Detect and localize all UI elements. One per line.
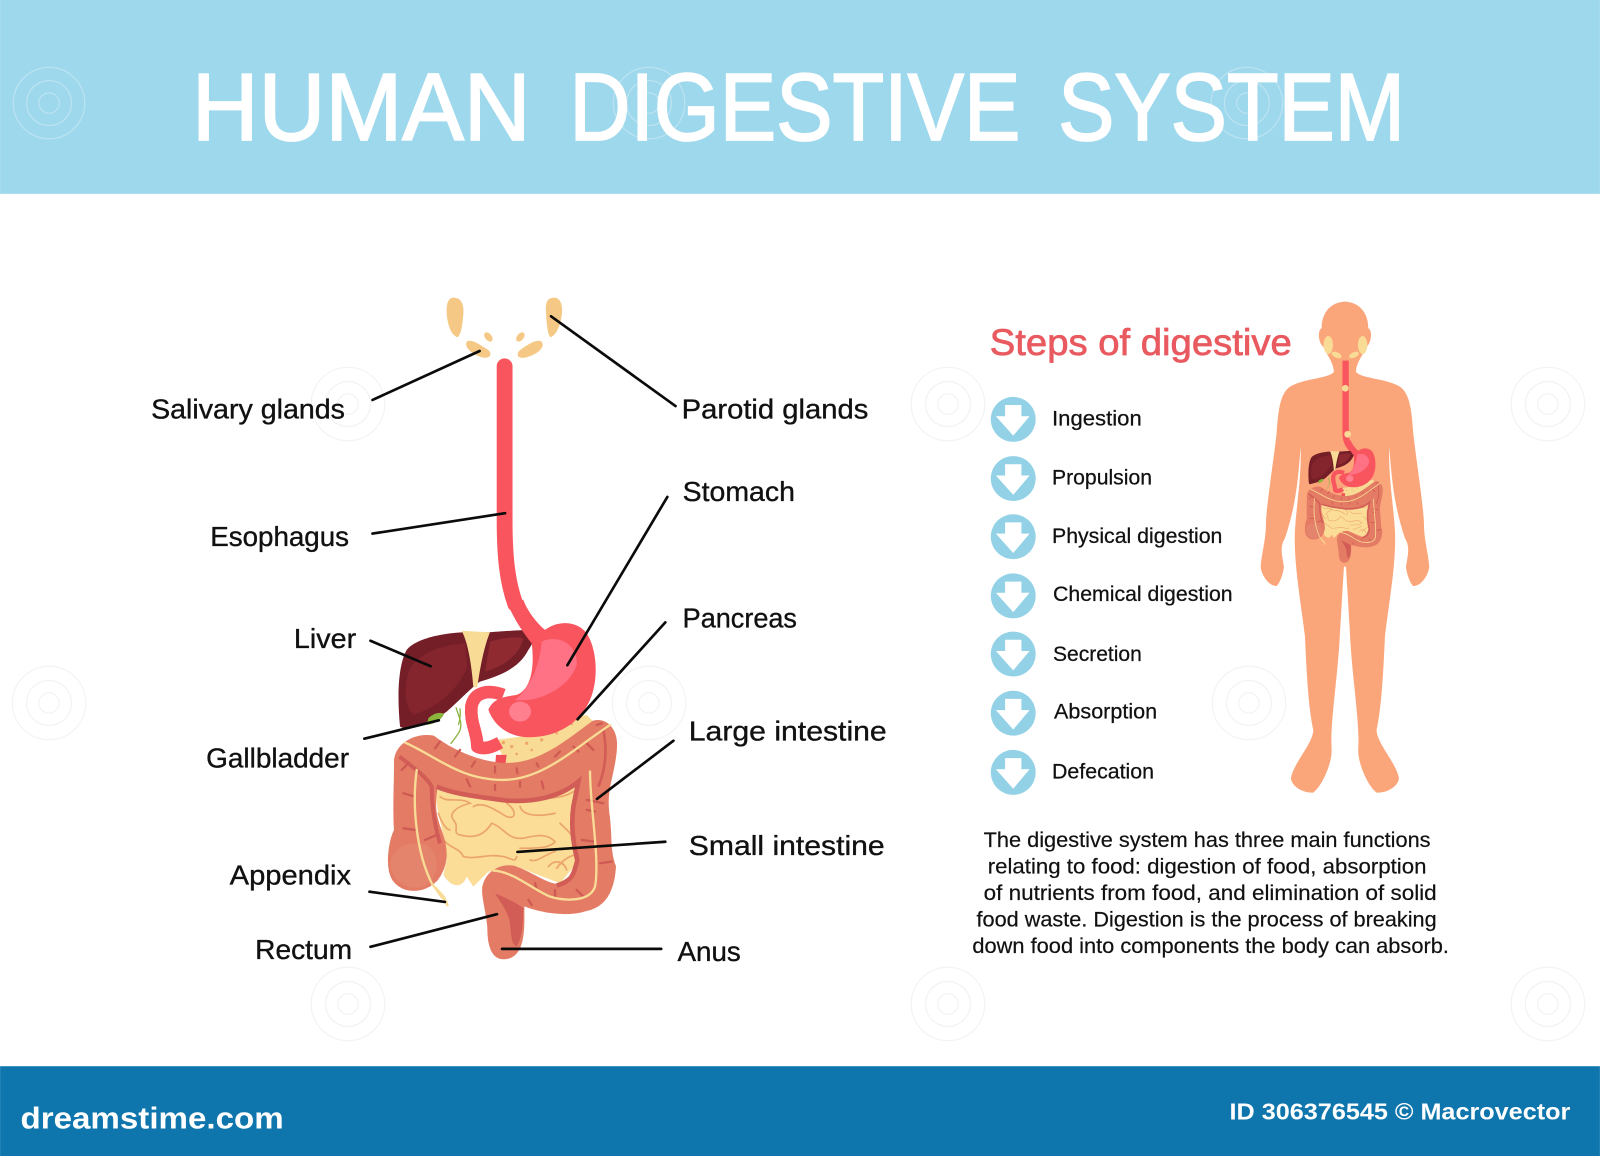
- organ labels: Parotid glands: [682, 393, 868, 424]
- step: propulsion: [991, 456, 1152, 501]
- organ labels: Liver: [294, 623, 356, 654]
- title: HUMAN: [192, 54, 531, 161]
- title: DIGESTIVE: [569, 54, 1020, 161]
- organ labels: Esophagus: [210, 521, 349, 552]
- diagram: digestive organs: [151, 298, 887, 967]
- step: defecation: Defecation: [1052, 759, 1154, 783]
- step: physical digestion: Physical digestion: [1052, 524, 1222, 548]
- human body figure: [1261, 302, 1429, 793]
- title: SYSTEM: [1058, 54, 1405, 161]
- organ labels: Small intestine: [689, 830, 885, 861]
- description paragraph: [972, 829, 1449, 958]
- body silhouette: [1261, 302, 1429, 793]
- steps list: [991, 397, 1233, 795]
- pancreas: [495, 715, 595, 765]
- gallbladder: [427, 713, 444, 725]
- title: [192, 54, 1405, 161]
- footer site name: dreamstime.com: [20, 1101, 284, 1135]
- organ labels: [151, 393, 887, 967]
- footer image id: ID 306376545 © Macrovector: [1230, 1098, 1570, 1124]
- organ labels: Anus: [678, 936, 741, 967]
- organ labels: Salivary glands: [151, 393, 345, 424]
- duodenum lower: [495, 755, 507, 767]
- stomach: [488, 600, 596, 737]
- organ labels: Stomach: [683, 476, 795, 507]
- step: absorption: Absorption: [1054, 699, 1157, 723]
- large intestine: [389, 721, 616, 958]
- step: secretion: Secretion: [1053, 642, 1142, 666]
- organ labels: Appendix: [230, 860, 351, 891]
- esophagus: [505, 366, 515, 604]
- step: absorption: [991, 691, 1157, 736]
- organ labels: Pancreas: [683, 602, 797, 633]
- header banner: [0, 0, 1600, 194]
- liver: [399, 630, 534, 728]
- steps heading: Steps of digestive: [990, 322, 1292, 363]
- bile duct: [451, 707, 461, 744]
- step: chemical digestion: [991, 573, 1233, 618]
- appendix: [436, 888, 447, 905]
- leader lines: [364, 316, 676, 949]
- description paragraph: food waste. Digestion is the process of breaking: [977, 908, 1437, 931]
- internal organs group: [389, 600, 616, 958]
- step: physical digestion: [991, 514, 1222, 559]
- organ labels: Gallbladder: [206, 742, 349, 773]
- description paragraph: down food into components the body can absorb.: [972, 935, 1449, 958]
- small intestine: [435, 782, 580, 887]
- footer bar: [0, 1066, 1600, 1156]
- description paragraph: The digestive system has three main functions: [984, 829, 1431, 852]
- step: propulsion: Propulsion: [1052, 466, 1152, 490]
- description paragraph: relating to food: digestion of food, absorption: [988, 855, 1426, 878]
- step: chemical digestion: Chemical digestion: [1053, 582, 1233, 606]
- step: defecation: [991, 750, 1154, 795]
- step: ingestion: [991, 397, 1142, 442]
- duodenum: [471, 692, 503, 748]
- small organs inside the body: [1305, 441, 1382, 562]
- organ labels: Large intestine: [689, 716, 887, 747]
- description paragraph: of nutrients from food, and elimination of solid: [984, 882, 1437, 905]
- organ labels: Rectum: [255, 934, 352, 965]
- salivary and parotid glands: [447, 298, 562, 358]
- step: ingestion: Ingestion: [1052, 406, 1142, 430]
- step: secretion: [991, 632, 1142, 676]
